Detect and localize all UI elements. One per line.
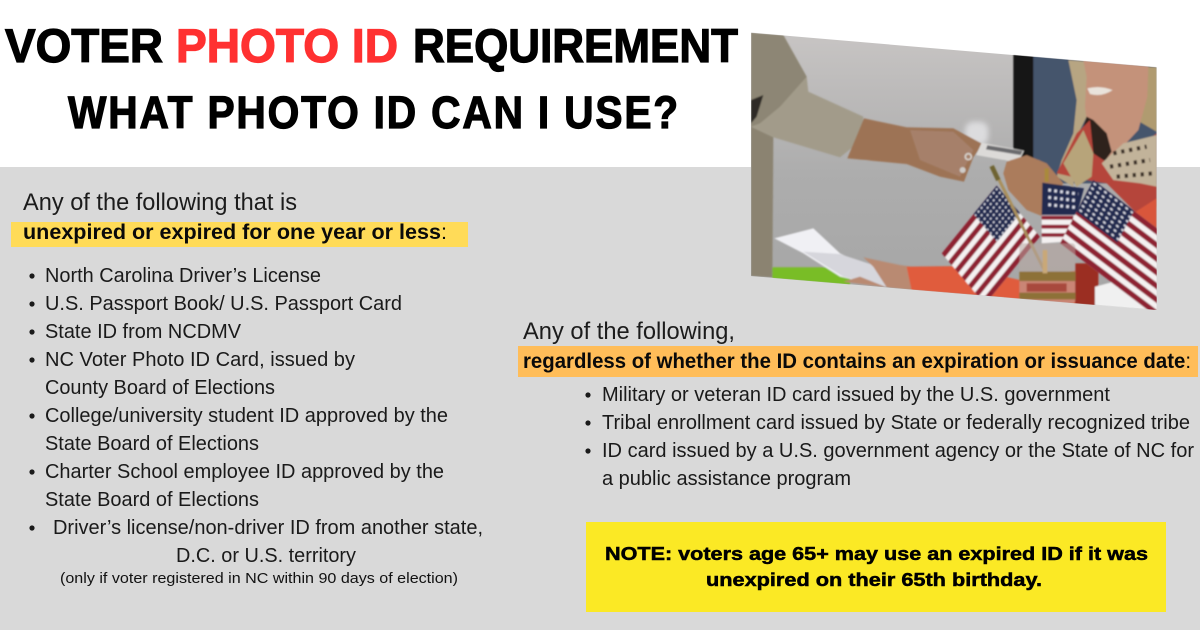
title: voter photo ID requirement: PHOTO ID (176, 19, 398, 72)
callout: note for voters 65+ (586, 522, 1166, 612)
left ID list: North Carolina Driver’s License (45, 265, 321, 287)
right ID list: Tribal enrollment card issued by State or federally recognized tribe (602, 412, 1190, 434)
left ID list: NC Voter Photo ID Card, issued by (45, 349, 355, 371)
left highlight band (11, 222, 468, 247)
left ID list: Driver’s license/non-driver ID from another state, (53, 517, 483, 539)
right ID list: Military or veteran ID card issued by the U.S. government (602, 384, 1110, 406)
left ID list: State Board of Elections (45, 433, 259, 455)
callout: note for voters 65+: NOTE: voters age 65+ may use an expired ID if it was (605, 543, 1148, 564)
photo: voter handing ID card to poll worker with flags (751, 32, 1157, 310)
right intro text: Any of the following, (523, 318, 735, 345)
right ID list (585, 384, 1194, 490)
callout: note for voters 65+: unexpired on their 65th birthday. (706, 569, 1042, 590)
left ID list: College/university student ID approved by the (45, 405, 448, 427)
subtitle: what photo ID can I use: WHAT PHOTO ID CAN I USE? (68, 87, 680, 138)
left section: IDs unexpired or expired one year or less (11, 189, 483, 587)
title: voter photo ID requirement: REQUIREMENT (413, 19, 738, 72)
left ID list: D.C. or U.S. territory (176, 545, 356, 567)
right highlight band (518, 346, 1198, 377)
title: voter photo ID requirement: VOTER (5, 19, 163, 72)
left ID list (29, 265, 483, 587)
left ID list: State Board of Elections (45, 489, 259, 511)
left ID list: (only if voter registered in NC within 90 days of election) (60, 570, 458, 587)
left intro text: Any of the following that is (23, 189, 297, 216)
right ID list: ID card issued by a U.S. government agency or the State of NC for (602, 440, 1194, 462)
left ID list: U.S. Passport Book/ U.S. Passport Card (45, 293, 402, 315)
right section: IDs regardless of expiration date (518, 318, 1198, 490)
left ID list: Charter School employee ID approved by the (45, 461, 444, 483)
title: voter photo ID requirement (5, 19, 738, 72)
left ID list: State ID from NCDMV (45, 321, 242, 343)
right ID list: a public assistance program (602, 468, 851, 490)
left highlight text: unexpired or expired for one year or less: (23, 220, 447, 244)
left ID list: County Board of Elections (45, 377, 275, 399)
grey background panel (0, 167, 1200, 630)
